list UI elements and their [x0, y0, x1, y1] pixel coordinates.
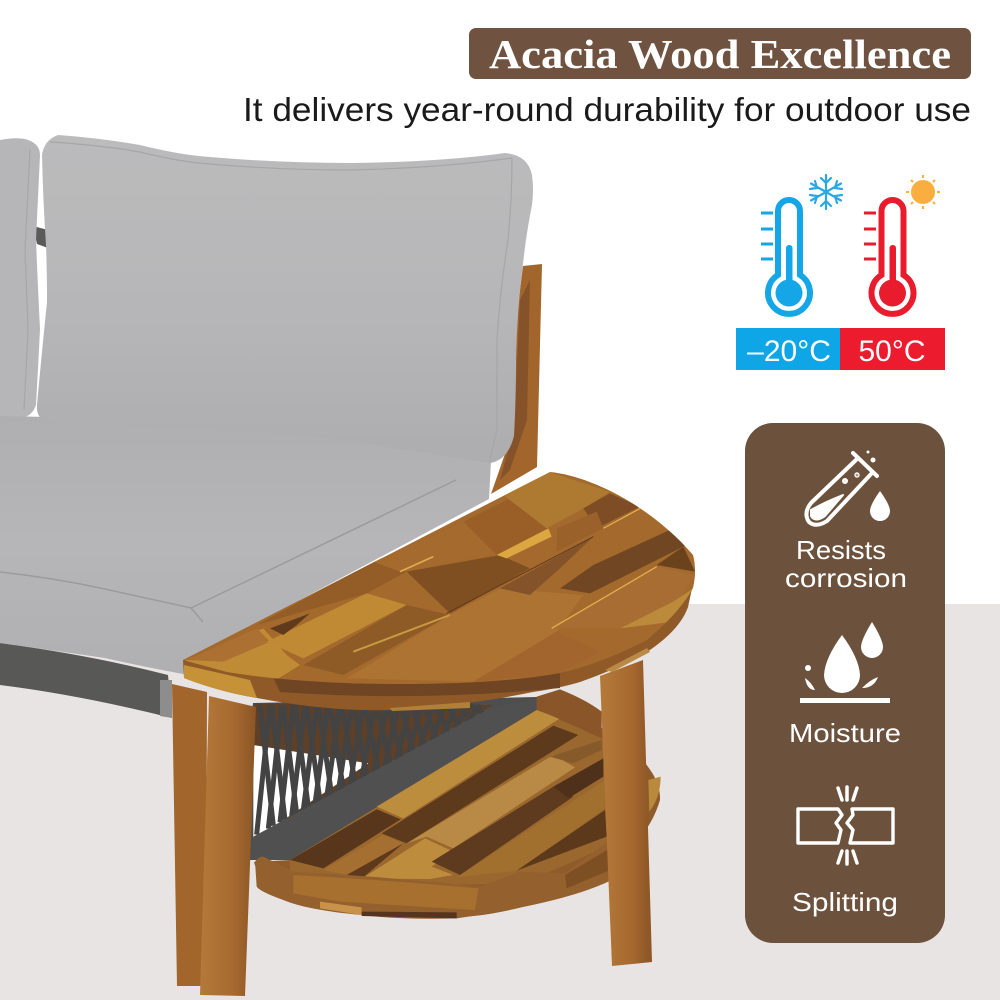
- icon: sun: [906, 175, 940, 209]
- icon: moisture: [800, 622, 890, 703]
- title: Acacia Wood Excellence: [489, 31, 951, 77]
- temperature bar: –20°C: [747, 335, 831, 368]
- front left leg: [200, 696, 256, 996]
- rear left leg: [172, 684, 207, 986]
- wooden back post: [491, 264, 542, 494]
- icon: snowflake: [810, 175, 842, 209]
- rope end strip: [160, 680, 172, 718]
- shelf front rim: [255, 840, 620, 919]
- label: resists corrosion: Resists: [796, 535, 886, 565]
- icon: splitting: [798, 787, 893, 864]
- subtitle: It delivers year-round durability for outdoor use: [243, 91, 971, 128]
- left back cushion: [0, 138, 40, 420]
- sofa: [0, 135, 542, 718]
- right leg: [600, 660, 652, 966]
- icon: test tube: [806, 451, 890, 525]
- rope band under seat: [0, 643, 172, 718]
- table surface: [183, 472, 695, 684]
- shelf base: [254, 700, 660, 918]
- label: resists corrosion: [785, 535, 907, 593]
- temperature bar: [736, 328, 945, 370]
- temperature bar: 50°C: [858, 335, 926, 368]
- back cushion: [37, 135, 533, 463]
- rope weave: [250, 697, 537, 860]
- table top: [170, 460, 710, 711]
- icon: cold thermometer: [761, 200, 810, 314]
- seat cushion: [0, 416, 491, 674]
- table legs: [172, 684, 256, 996]
- label: resists corrosion: corrosion: [785, 563, 907, 593]
- table edge: [183, 555, 695, 710]
- icon: hot thermometer: [864, 200, 914, 314]
- shelf ring tint: [648, 777, 661, 812]
- shelf surface: [290, 710, 607, 887]
- label: moisture: Moisture: [789, 718, 901, 748]
- label: splitting: Splitting: [792, 887, 898, 917]
- panel: features: [745, 423, 945, 943]
- rear rope: [33, 226, 48, 248]
- shelf back rim: [537, 689, 602, 738]
- lower shelf: [254, 689, 661, 919]
- gaps: [253, 703, 493, 859]
